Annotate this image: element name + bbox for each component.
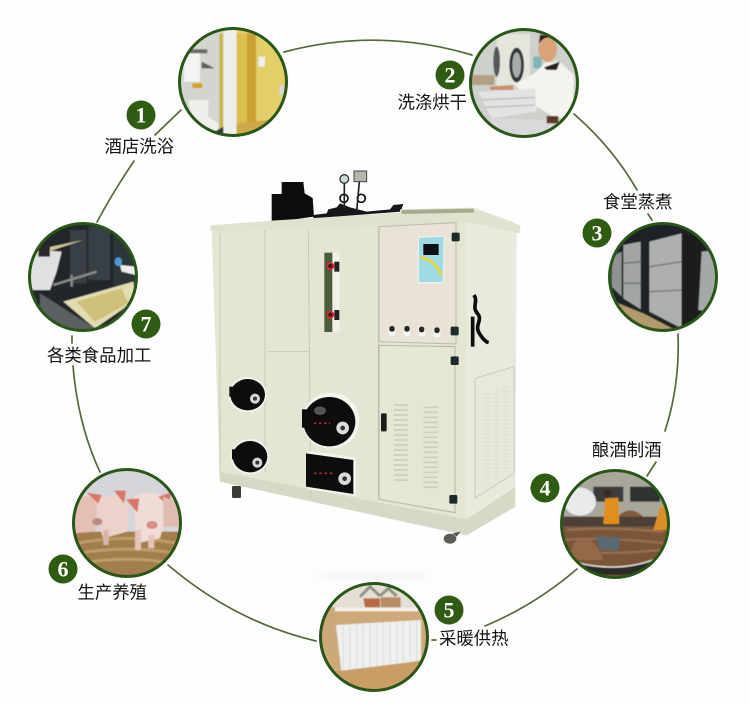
front face [212,220,467,535]
ring connector lines [72,40,678,641]
number badge 1 [126,100,156,130]
item 5: heating supply [320,584,509,691]
number badge 1: 1 [136,102,146,128]
photo border [30,224,136,330]
label: 各类食品加工 [47,346,151,366]
burner housing [272,182,314,223]
photo border [180,28,286,136]
right side panel [467,220,517,535]
power cable [473,295,489,347]
control panel door [379,223,456,344]
side access panel [475,367,514,498]
item 7: food processing [29,224,161,366]
photo: food processing line [29,224,136,331]
number badge 2 [436,60,464,90]
photo: piglets on straw [73,470,180,577]
door latch [381,413,387,431]
panel seams [220,227,378,498]
item 2: laundry drying [398,30,578,138]
door bolts [449,233,460,504]
item 3: canteen steaming [582,192,718,331]
control display [418,236,444,283]
number badge 5: 5 [444,598,454,622]
central machine: biomass steam generator [210,171,521,544]
upper left hatch [229,377,267,412]
photo: steam cabinets [610,224,718,331]
number badge 2: 2 [444,62,456,88]
photo border [74,470,180,576]
rectangular ash door [306,451,356,496]
item 4: brewing liquor [530,440,668,578]
item 6: livestock breeding [48,470,180,602]
label: 酒店洗浴 [104,136,174,156]
lower door [379,345,455,513]
main round furnace door [302,393,359,449]
number badge 5 [434,596,464,624]
number badge 7: 7 [140,312,152,336]
base strip [219,472,515,535]
number badge 4: 4 [540,476,550,500]
photo: laundry worker [471,30,578,138]
number badge 3: 3 [592,220,602,246]
photo: wall radiator [321,584,427,691]
castor right [444,532,461,544]
label: 生产养殖 [78,582,147,602]
photo border [610,224,716,330]
castor left [232,486,241,498]
control knobs [389,326,440,337]
number badge 6: 6 [58,556,68,582]
item 1: hotel bathing [104,28,287,156]
steam pipes and gauges [313,171,403,218]
top lid [210,208,521,233]
photo: brewery workers [562,471,668,578]
shadow under machine [313,572,437,580]
photo: hotel bathroom [180,29,287,137]
number badge 7 [132,310,160,338]
label: 采暖供热 [439,628,509,648]
label: 食堂蒸煮 [603,192,673,212]
label: 洗涤烘干 [398,92,467,112]
lower left hatch [231,439,269,474]
door vents [394,405,438,487]
water level gauge [324,253,340,332]
photo border [562,470,668,578]
label: 酿酒制酒 [592,440,662,460]
photo border [320,584,428,690]
photo border [470,30,578,136]
